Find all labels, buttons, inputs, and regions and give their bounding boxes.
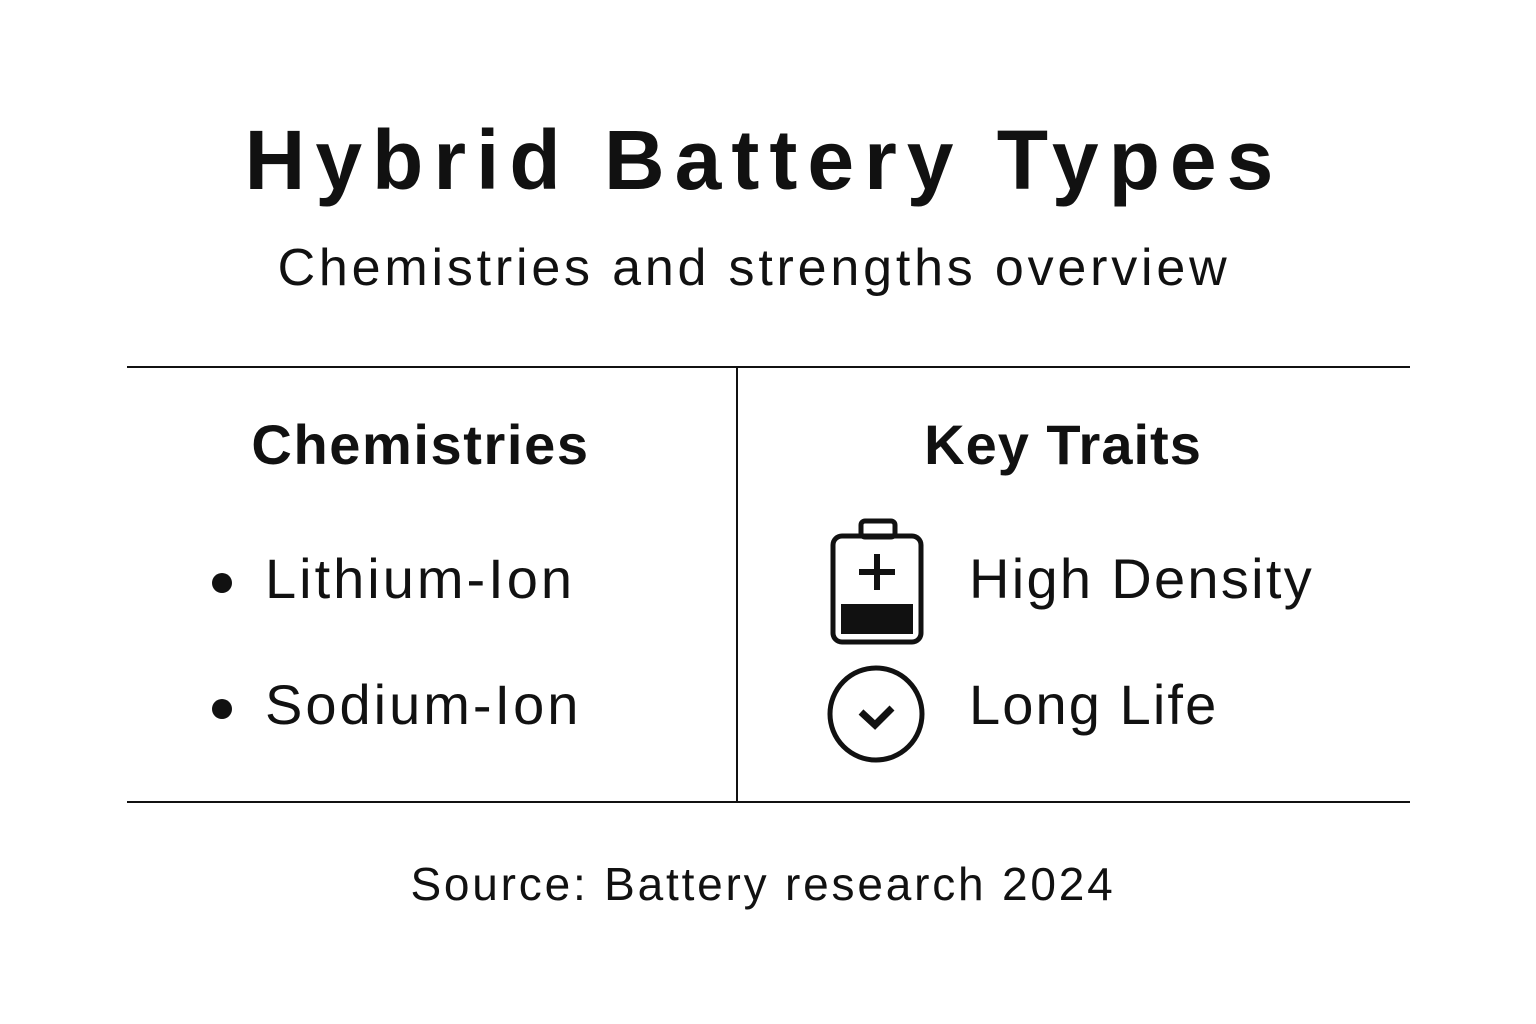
- icon: battery: [830, 518, 924, 644]
- panel: chemistries: [212, 413, 590, 736]
- heading: chemistries: Chemistries: [251, 413, 590, 476]
- table: [127, 366, 1410, 803]
- item: lithium-ion: Lithium-Ion: [265, 547, 575, 610]
- icon: check circle: [828, 666, 924, 762]
- text: high density: High Density: [969, 547, 1314, 610]
- item: sodium-ion: Sodium-Ion: [265, 673, 581, 736]
- subtitle: Chemistries and strengths overview: [278, 239, 1230, 297]
- heading: key traits: Key Traits: [924, 413, 1202, 476]
- text: long life: Long Life: [969, 673, 1218, 736]
- panel: key traits: [828, 413, 1314, 762]
- title: Hybrid Battery Types: [245, 113, 1283, 207]
- source: Source: Battery research 2024: [410, 858, 1116, 910]
